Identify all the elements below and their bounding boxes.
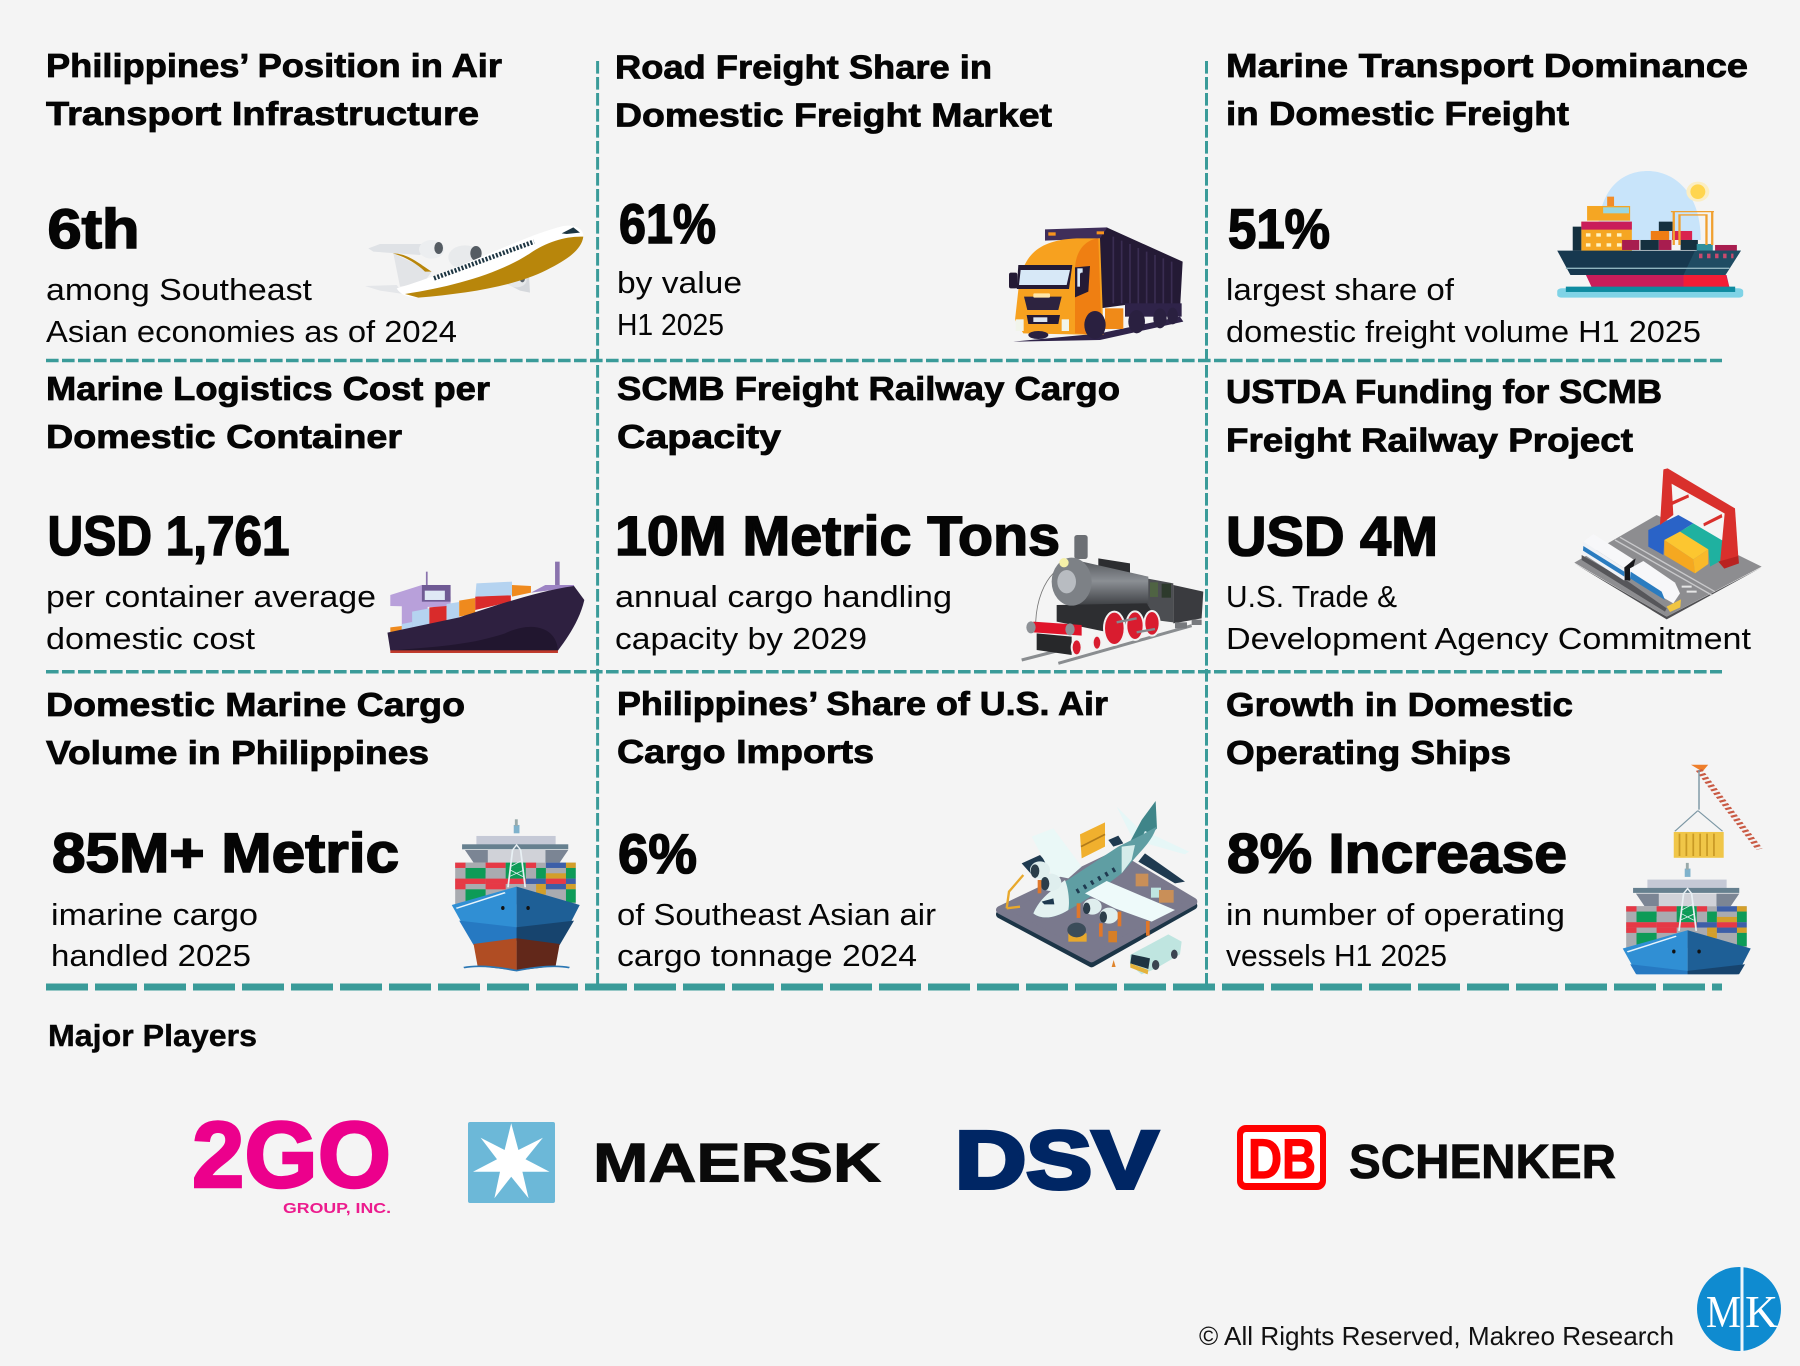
logo: DB Schenker — [1237, 1125, 1616, 1190]
heading: Growth in Domestic — [1226, 686, 1573, 723]
logo: DB Schenker: SCHENKER — [1349, 1136, 1616, 1189]
icon: rail port with crane — [1574, 468, 1762, 619]
heading: Freight Railway Project — [1226, 422, 1633, 458]
value: 61% — [619, 192, 716, 255]
value: 8% Increase — [1227, 822, 1567, 884]
panel: marine logistics cost — [46, 370, 584, 656]
description: handled 2025 — [51, 938, 251, 973]
section heading: major players: Major Players — [48, 1018, 257, 1053]
logo: Maersk: MAERSK — [593, 1132, 881, 1194]
icon: steam locomotive — [1022, 535, 1203, 663]
icon: truck — [1009, 227, 1183, 342]
value: 6% — [618, 822, 697, 885]
heading: USTDA Funding for SCMB — [1226, 373, 1662, 410]
logo: DB Schenker: DB — [1248, 1127, 1316, 1190]
icon: container ship front view, lower — [1622, 862, 1751, 974]
description: Asian economies as of 2024 — [46, 314, 457, 349]
heading: Operating Ships — [1226, 734, 1511, 771]
description: capacity by 2029 — [615, 621, 867, 656]
heading: Marine Transport Dominance — [1226, 47, 1748, 84]
icon: airplane — [365, 226, 583, 298]
heading: Transport Infrastructure — [46, 95, 479, 132]
heading: Volume in Philippines — [46, 734, 429, 771]
heading: SCMB Freight Railway Cargo — [617, 370, 1120, 407]
description: cargo tonnage 2024 — [617, 938, 917, 973]
description: vessels H1 2025 — [1226, 938, 1447, 973]
value: 6th — [48, 197, 140, 260]
logo: DSV: DSV — [955, 1115, 1158, 1206]
icon: isometric cargo airplane — [1000, 801, 1193, 974]
heading: Cargo Imports — [617, 733, 874, 770]
heading: Domestic Marine Cargo — [46, 686, 465, 723]
panel: share of US air cargo imports — [617, 685, 1193, 974]
panel: road freight share — [615, 48, 1183, 342]
panel: USTDA funding — [1226, 373, 1762, 656]
description: annual cargo handling — [615, 579, 952, 614]
panel: freight railway capacity — [615, 370, 1203, 663]
description: imarine cargo — [51, 897, 258, 932]
icon: crane lifting container — [1674, 765, 1759, 858]
panel: air transport position — [46, 47, 583, 349]
description: U.S. Trade & — [1226, 579, 1397, 614]
logo: Maersk — [468, 1122, 881, 1203]
value: USD 1,761 — [48, 504, 290, 567]
logo: Makreo MK circle: M — [1706, 1286, 1741, 1337]
heading: Capacity — [617, 418, 782, 455]
description: domestic cost — [46, 621, 255, 656]
heading: Domestic Freight Market — [615, 96, 1052, 134]
logo: 2GO Group: GROUP, INC. — [283, 1200, 391, 1217]
description: Development Agency Commitment — [1226, 621, 1751, 656]
panel: marine transport dominance — [1226, 47, 1748, 349]
description: in number of operating — [1226, 897, 1565, 932]
value: 85M+ Metric — [52, 821, 399, 884]
icon: cargo ship with sun — [1557, 171, 1743, 298]
description: by value — [617, 265, 742, 300]
panel: growth in operating ships — [1226, 692, 1762, 974]
footer copyright: © All Rights Reserved, Makreo Research — [1199, 1321, 1674, 1351]
grid dividers — [46, 61, 1722, 987]
description: largest share of — [1226, 272, 1454, 307]
description: H1 2025 — [617, 307, 724, 342]
description: domestic freight volume H1 2025 — [1226, 314, 1701, 349]
value: 10M Metric Tons — [615, 504, 1060, 567]
logo: Makreo MK circle: K — [1745, 1286, 1778, 1337]
heading: in Domestic Freight — [1226, 95, 1569, 132]
heading: Philippines’ Share of U.S. Air — [617, 685, 1108, 722]
heading: Road Freight Share in — [615, 48, 992, 86]
description: of Southeast Asian air — [617, 897, 936, 932]
heading: Philippines’ Position in Air — [46, 47, 502, 84]
value: USD 4M — [1226, 504, 1438, 568]
value: 51% — [1228, 197, 1330, 260]
icon: container ship front view — [452, 819, 580, 971]
heading: Marine Logistics Cost per — [46, 370, 490, 407]
logo: 2GO Group: 2GO — [192, 1102, 391, 1207]
description: per container average — [46, 579, 376, 614]
icon: dark container ship — [387, 562, 584, 653]
heading: Domestic Container — [46, 418, 402, 455]
description: among Southeast — [46, 272, 312, 307]
panel: domestic marine cargo volume — [46, 686, 580, 973]
logo: Makreo MK circle — [1697, 1266, 1781, 1352]
